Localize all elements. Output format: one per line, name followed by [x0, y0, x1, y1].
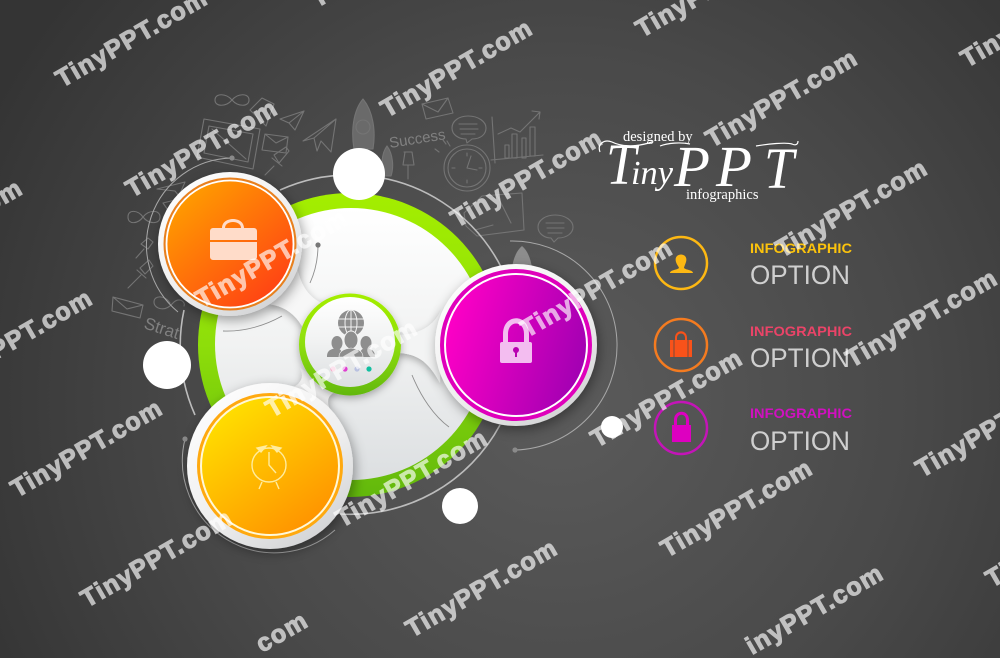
icon: globe and people	[327, 310, 375, 357]
orange ring	[164, 178, 296, 310]
doodle: envelope left	[262, 134, 288, 153]
watermarks: TinyPPT.com	[331, 424, 493, 533]
doodle: infinity top	[215, 95, 249, 105]
orbit lines	[146, 155, 617, 553]
logo swashes	[599, 141, 798, 152]
logo script name: P	[673, 134, 710, 199]
doodle: plane behind orange	[157, 182, 185, 220]
icon: padlock	[500, 318, 532, 363]
neck: purple	[396, 305, 443, 383]
watermarks: TinyPPT.com	[121, 94, 283, 203]
doodle: wall clock	[435, 140, 490, 191]
yellow inner line	[201, 397, 339, 535]
orbit: purple arc with dot	[510, 241, 617, 453]
watermarks: TinyPPT.com	[401, 534, 563, 643]
purple ring	[440, 269, 592, 421]
watermarks: TinyPPT.com	[771, 154, 933, 263]
doodle: infinity lower left	[154, 297, 184, 309]
doodle: small plane	[280, 111, 304, 130]
status dots	[330, 366, 372, 372]
doodle: speech bubble	[452, 116, 486, 143]
legend icon 1: person	[655, 237, 707, 289]
doodle: podium	[464, 193, 524, 236]
doodle: infinity left	[128, 211, 160, 223]
doodle sketches behind the circles	[112, 95, 573, 343]
neck: yellow	[292, 368, 338, 410]
doodle: speech bubble lower	[538, 215, 573, 242]
doodle: pin left big	[128, 260, 153, 288]
icon: briefcase	[210, 219, 257, 260]
orbit: big ring bottom	[340, 425, 500, 514]
watermarks: TinyPPT.com	[261, 314, 423, 423]
green disc ring	[198, 193, 502, 497]
legend heading 1: INFOGRAPHIC	[750, 240, 852, 256]
orbit: orange arc with dot	[146, 155, 235, 312]
step 2: purple lock circle	[435, 264, 597, 426]
doodle: strategy label: Strat	[142, 314, 182, 343]
watermarks: TinyPPT.com	[6, 394, 168, 503]
brand logo	[599, 129, 798, 203]
dot bottom	[442, 488, 478, 524]
step 3: yellow clock circle	[187, 383, 353, 549]
doodle: success label: Success	[388, 126, 447, 152]
legend icon 2: briefcase lock	[655, 319, 707, 371]
doodle: push pin top	[265, 147, 289, 175]
white disc	[215, 208, 487, 480]
watermarks: TinyPPT.com	[191, 204, 353, 313]
doodle: small rocket lower	[512, 246, 532, 268]
doodle: small rocket	[382, 146, 393, 176]
legend option 3: OPTION	[750, 426, 850, 456]
disc thin arcs	[223, 245, 449, 427]
legend heading 2: INFOGRAPHIC	[750, 323, 852, 339]
legend row 3	[655, 402, 852, 456]
legend row 1	[655, 237, 852, 290]
watermarks: TinyPPT.com	[76, 504, 238, 613]
dot right	[601, 416, 623, 438]
watermarks: com	[251, 606, 313, 658]
logo script name: iny	[631, 155, 674, 192]
doodle: envelope lower left	[112, 297, 143, 318]
icon: alarm clock	[252, 446, 286, 489]
central disc	[198, 193, 502, 497]
watermarks: TinyPPT.com	[446, 124, 608, 233]
watermarks: TinyPPT.com	[586, 344, 748, 453]
logo script name	[606, 132, 797, 201]
purple inner line	[445, 274, 587, 416]
orbit: big ring left	[180, 310, 195, 415]
doodle: bar chart	[491, 111, 543, 163]
orbit: yellow arc with dot	[182, 436, 335, 553]
doodle: pin	[403, 152, 414, 179]
legend	[655, 237, 852, 456]
purple rim	[435, 264, 597, 426]
designed by: designed by	[623, 129, 693, 145]
dot left	[143, 341, 191, 389]
yellow ring	[197, 393, 343, 539]
central green ring	[299, 294, 401, 396]
watermarks: TinyPPT.com	[656, 454, 818, 563]
central white face	[305, 297, 395, 387]
central globe circle	[299, 294, 401, 396]
doodle: rocket	[353, 99, 374, 149]
decorative white dots	[143, 148, 623, 524]
orange rim	[158, 172, 302, 316]
doodle: pin left small	[136, 238, 153, 258]
yellow rim	[187, 383, 353, 549]
doodle: rocket window	[356, 120, 370, 134]
logo script name: P	[715, 134, 752, 199]
orange inner line	[166, 180, 294, 308]
logo script name: T	[606, 132, 639, 197]
white connector necks	[268, 262, 443, 410]
legend heading 3: INFOGRAPHIC	[750, 405, 852, 421]
disc arc dot	[315, 242, 321, 248]
doodle: tablet	[197, 119, 260, 169]
legend icon 3: padlock	[655, 402, 707, 454]
watermarks: inyPPT.com	[741, 559, 889, 658]
doodle: card	[250, 98, 274, 126]
doodle: large plane	[303, 119, 336, 152]
logo script name: T	[764, 136, 797, 201]
legend option 2: OPTION	[750, 343, 850, 373]
doodle: envelope right	[422, 98, 453, 119]
dot top	[333, 148, 385, 200]
orbit: big ring	[280, 175, 520, 345]
watermarks: TinyPPT.com	[701, 44, 863, 153]
watermarks: TinyPPT.com	[516, 234, 678, 343]
watermarks: TinyPPT.com	[376, 14, 538, 123]
watermarks: TinyPPT.com	[841, 264, 1000, 373]
step 1: orange briefcase circle	[158, 172, 302, 316]
infographics: infographics	[686, 187, 759, 203]
legend option 1: OPTION	[750, 260, 850, 290]
legend row 2	[655, 319, 852, 373]
neck: orange	[268, 262, 326, 328]
